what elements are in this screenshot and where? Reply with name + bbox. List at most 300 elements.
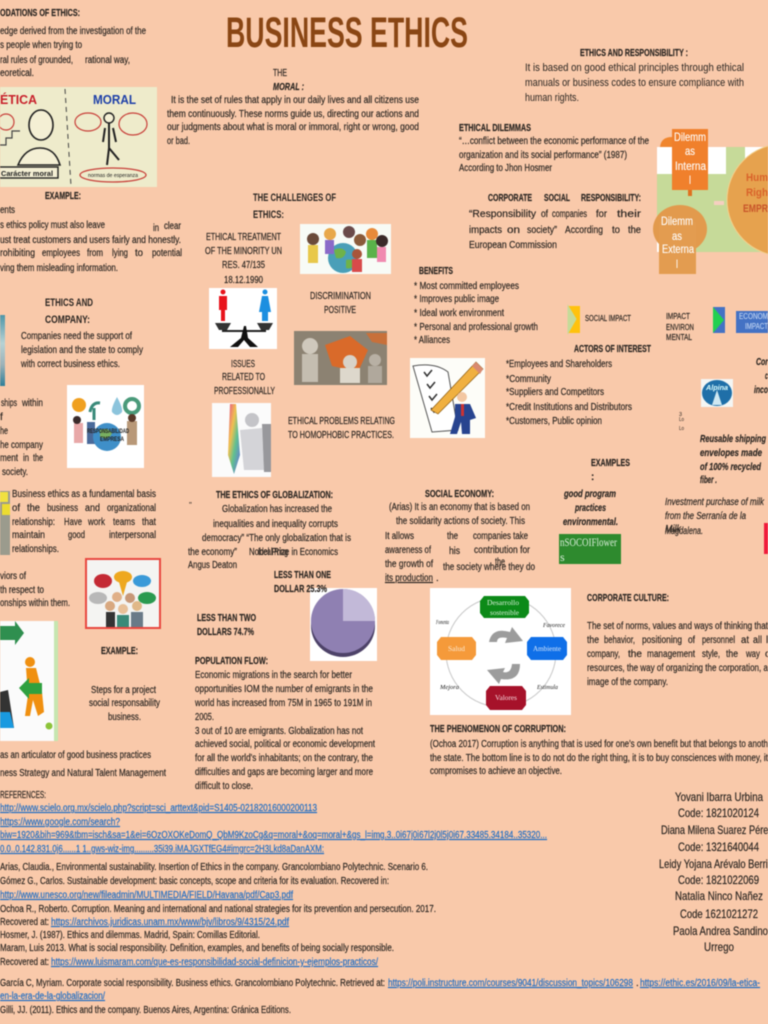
image: team with speech bubbles xyxy=(86,559,160,628)
text: social economy body: the xyxy=(495,557,505,568)
list: benefits: * Improves public image xyxy=(414,294,499,305)
heading: csr: CORPORATE xyxy=(488,193,532,204)
title: BUSINESS ETHICS xyxy=(226,9,468,57)
heading: the moral xyxy=(273,68,304,93)
panel: authors: Urrego xyxy=(704,940,734,954)
callout: external dilemmas: Externa xyxy=(662,242,694,256)
text: social economy body: his xyxy=(449,546,460,557)
text: behaviors of companies: onships within them. xyxy=(0,598,70,609)
text: business ethics as fundamental basis: interpersonal xyxy=(109,530,156,541)
list: reference entries: biw=1920&bih=969&tbm=isch&sa=1&ei=6OzOXOKeDomQ_QbM9KzoCg&q=moral+&oq=moral+&gs_l=img.3..0i67j0i67l2j0l5j0i67.33485.34184..35320... xyxy=(0,830,547,841)
arrow: upper curve xyxy=(489,627,523,643)
heading: ethics and responsibility: ETHICS AND RESPONSIBILITY : xyxy=(580,48,688,59)
text: foundations body: eoretical. xyxy=(0,68,34,79)
text: discrimination positive: DISCRIMINATION xyxy=(310,291,371,302)
text: population body: 2005. xyxy=(195,712,214,723)
text: corporate culture body: style, xyxy=(702,649,720,660)
text: csr body: the xyxy=(628,225,641,236)
text: example body: potential xyxy=(152,248,182,259)
node: desarrollo sostenible: Desarrollo xyxy=(487,599,520,607)
panel: corporate social responsibility xyxy=(469,193,642,251)
text: social economy body: contribution for xyxy=(474,545,531,556)
list: reference entries: https://www.luismaram.com/que-es-responsibilidad-social-definicion-y-ejemplos-practicos/ xyxy=(51,957,378,968)
list: reference entries: . xyxy=(636,978,639,989)
text: example body: clear xyxy=(164,221,182,232)
text: company support: with correct business ethics. xyxy=(20,359,120,370)
label: environmental impact: MENTAL xyxy=(666,333,692,342)
label: less than one dollar: LESS THAN ONE xyxy=(274,570,331,581)
text: moral body: It is the set of rules that apply in our daily lives and all citizens use xyxy=(171,95,419,106)
text: business ethics as fundamental basis: and xyxy=(85,503,100,514)
heading: challenges: ETHICS: xyxy=(253,209,284,221)
text: globalization body xyxy=(188,501,351,571)
callout: internal dilemmas: l xyxy=(689,173,691,187)
text: social economy body: the society where they do xyxy=(443,562,535,573)
list: reference entries: Recovered at: xyxy=(0,957,49,968)
image: etica and moral comparison: normas de esperanza xyxy=(88,173,138,179)
text: relationships within: society. xyxy=(2,467,28,478)
node: valores xyxy=(486,686,526,710)
list: reference entries: Maram, Luis 2013. What is social responsibility. Definition, examples, and benefits of being socially responsible. xyxy=(0,943,394,954)
label: less than two dollars xyxy=(197,613,256,638)
icon: social impact chevron xyxy=(568,306,631,333)
heading: csr: SOCIAL xyxy=(544,193,570,204)
list: actors: *Employees and Shareholders xyxy=(506,359,612,370)
text: corporate culture body: of xyxy=(688,635,695,646)
image: red clipped block xyxy=(764,523,768,554)
panel: benefits xyxy=(414,266,538,346)
text: tiny marks: Lo xyxy=(679,417,684,423)
list: reference entries: http://www.unesco.org/new/fileadmin/MULTIMEDIA/FIELD/Havana/pdf/Cap3.pdf xyxy=(0,890,293,901)
image: environmental responsibility people: RESPONSABILIDAD xyxy=(87,429,129,435)
text: csr body: society” xyxy=(527,225,557,236)
callout: external dilemmas: l xyxy=(676,257,678,271)
text: csr body: of xyxy=(541,209,548,220)
chart: pie of income xyxy=(310,588,377,661)
text: example body: ving them misleading information. xyxy=(0,263,118,274)
text: social economy body: companies take xyxy=(473,531,528,542)
image: rainbow flag figures xyxy=(212,403,271,477)
heading: ethics and company xyxy=(45,297,93,326)
panel: ethics of globalization xyxy=(188,490,377,661)
heading: csr: RESPONSIBILITY: xyxy=(581,193,641,204)
text: population body: difficult to close. xyxy=(195,781,253,792)
text: relationships within: ment xyxy=(0,453,18,464)
text: corporate culture body: the xyxy=(726,649,738,660)
text: corporate culture body: way xyxy=(745,649,760,660)
text: business ethics as fundamental basis: business xyxy=(47,503,78,514)
panel: corporate culture xyxy=(587,593,768,688)
callout: internal dilemmas xyxy=(660,129,708,196)
node: ambiente xyxy=(527,637,567,660)
badge: flowers: s xyxy=(560,550,565,564)
text: population body xyxy=(194,670,375,792)
text: dilemmas body: According to Jhon Hosmer xyxy=(459,163,553,174)
text: relationships within: ships xyxy=(1,398,17,409)
image: sticky notes clipped xyxy=(0,491,10,555)
text: globalization body: Ideal Ring xyxy=(258,547,288,558)
text: social economy body xyxy=(385,502,535,584)
label: less than one dollar xyxy=(274,570,331,595)
text: moral body xyxy=(167,95,419,147)
list: benefits: * Alliances xyxy=(414,335,450,346)
heading: corporate culture: CORPORATE CULTURE: xyxy=(587,593,669,604)
panel: ethical dilemmas xyxy=(459,123,649,174)
list: reference entries: Gómez G., Carlos. Sustainable development: basic concepts, scope and criteria for its evaluation. Recovered in: xyxy=(0,876,389,887)
text: dilemmas body xyxy=(459,136,649,174)
node: valores: Valores xyxy=(495,694,517,702)
text: business ethics as fundamental basis: the xyxy=(27,503,40,514)
text: moral body: our judgments about what is moral or immoral, right or wrong, good xyxy=(167,122,419,133)
badge: flowers xyxy=(559,534,621,564)
text: articulator of good practices xyxy=(0,750,166,779)
icon: alpina logo xyxy=(701,379,733,407)
list: reference entries: http://www.scielo.org.mx/scielo.php?script=sci_arttext&pid=S1405-02182016000200113 xyxy=(0,803,317,814)
text: foundations body: rational way, xyxy=(85,55,130,66)
labels: cycle verbs: Mejora xyxy=(439,685,459,691)
image: balance scale xyxy=(209,288,277,349)
label: less than two dollars: DOLLARS 74.7% xyxy=(197,627,254,638)
list: actors: *Suppliers and Competitors xyxy=(506,387,604,398)
list: reference entries: https://archivos.juridicas.unam.mx/www/bjv/libros/9/4315/24.pdf xyxy=(51,917,289,928)
text: business ethics as fundamental basis: Have xyxy=(64,517,82,528)
diagram: dilemmas and human rights xyxy=(653,129,768,274)
text: csr body: companies xyxy=(552,209,587,220)
diagram: sustainable development cycle xyxy=(430,588,571,715)
text: globalization body: the economy” xyxy=(188,547,237,558)
text: steps body xyxy=(89,685,160,723)
text: corporate culture body: company, xyxy=(587,649,620,660)
text: moral body: or bad. xyxy=(167,136,190,147)
heading: ethical dilemmas: ETHICAL DILEMMAS xyxy=(459,123,531,134)
text: company clipped note xyxy=(754,357,768,396)
text: globalization body: democracy” “The only globalization that is xyxy=(202,533,351,544)
image: orange figures photo xyxy=(294,331,387,385)
callout: internal dilemmas: Dilemm xyxy=(674,130,706,144)
image: environmental responsibility people xyxy=(67,385,144,468)
text: good program practices: good program xyxy=(563,489,616,500)
text: relationships within: within xyxy=(21,398,43,409)
text: company support: Companies need the support of xyxy=(21,331,132,342)
panel: the challenges of ethics xyxy=(205,192,395,477)
label: environmental impact xyxy=(666,312,694,342)
text: corporate culture body: positioning xyxy=(642,635,682,646)
text: example body: in xyxy=(153,223,159,234)
panel: references xyxy=(0,790,760,1016)
text: discrimination positive xyxy=(310,291,371,316)
text: articulator of good practices: as an articulator of good business practices xyxy=(0,750,151,761)
text: issues related to professionally xyxy=(214,359,275,397)
text: example body: employees xyxy=(42,248,80,259)
panel: examples xyxy=(559,458,630,564)
label: environmental impact: ENVIRON xyxy=(666,323,694,332)
text: business ethics as fundamental basis: teams xyxy=(113,517,135,528)
heading: the moral: THE xyxy=(273,68,287,79)
panel: phenomenon of corruption xyxy=(430,724,768,777)
text: steps body: social responsability xyxy=(89,698,160,709)
text: behaviors of companies: th respect to xyxy=(0,585,44,596)
arrow: lower curve xyxy=(487,664,520,684)
text: company support: legislation and the state to comply xyxy=(21,345,143,356)
text: social economy body: (Arias) It is an economy that is based on xyxy=(389,502,530,513)
text: social economy body: the growth of xyxy=(385,559,433,570)
text: steps body: business. xyxy=(108,712,141,723)
text: foundations body: s people when trying to xyxy=(0,40,82,51)
text: corporate culture body: all xyxy=(753,635,762,646)
text: steps body: Steps for a project xyxy=(91,685,156,696)
heading: population flow: POPULATION FLOW: xyxy=(195,656,268,667)
label: less than one dollar: DOLLAR 25.3% xyxy=(274,584,327,595)
callout: internal dilemmas: Interna xyxy=(675,159,706,173)
text: ethical problems homophobic: ETHICAL PROBLEMS RELATING xyxy=(288,416,395,427)
labels: cycle verbs: Estimula xyxy=(536,685,558,691)
icon: economic impact chevron xyxy=(713,307,768,333)
icon: social impact chevron: SOCIAL IMPACT xyxy=(585,314,631,323)
text: dilemmas body: “…conflict between the economic performance of the xyxy=(459,136,649,147)
heading: social economy: SOCIAL ECONOMY: xyxy=(425,489,494,500)
callout: external dilemmas: Dilemm xyxy=(661,214,693,228)
text: issues related to professionally: RELATED TO xyxy=(222,372,265,383)
text: csr body: their xyxy=(617,209,642,220)
text: investment purchase of milk: Magdalena. xyxy=(665,526,703,537)
text: business ethics as fundamental basis: relationship: xyxy=(12,517,55,528)
text: corporate culture body: at xyxy=(741,635,749,646)
panel: ethics and company xyxy=(0,297,144,478)
heading: ethics and company: ETHICS AND xyxy=(45,297,93,309)
list: reference entries: Arias, Claudia., Environmental sustainability. Insertion of Ethics in the company. Grancolombiano Polytechnic. Scenario 6. xyxy=(0,862,428,873)
text: corruption body: compromises to achieve an objective. xyxy=(430,766,562,777)
node: salud: Salud xyxy=(448,645,466,653)
text: business ethics as fundamental basis: that xyxy=(142,517,156,528)
text: relationships within: the xyxy=(33,453,43,464)
text: csr body: “Responsibility xyxy=(469,209,536,220)
list: reference entries xyxy=(0,803,760,1016)
text: csr body: to xyxy=(612,225,620,236)
text: responsibility body: human rights. xyxy=(525,92,579,104)
text: population body: achieved social, political or economic development xyxy=(195,739,375,750)
heading: globalization: THE ETHICS OF GLOBALIZATION: xyxy=(216,490,333,501)
text: relationships within xyxy=(0,398,43,478)
text: example body: rohibiting xyxy=(0,248,35,259)
text: social economy body: its production xyxy=(385,573,433,584)
list: reference entries: Ochoa R., Roberto. Corruption. Meaning and international and national strategies for its prevention and persecution. 2017. xyxy=(0,904,436,915)
text: ethical problems homophobic: TO HOMOPHOBIC PRACTICES. xyxy=(288,430,394,441)
text: moral body: them continuously. These norms guide us, directing our actions and xyxy=(167,109,419,120)
heading: examples xyxy=(591,458,630,483)
heading: foundations: ODATIONS OF ETHICS: xyxy=(0,8,80,19)
text: population body: for all the world's inhabitants; on the contrary, the xyxy=(195,753,373,764)
text: social economy body: . xyxy=(436,573,439,584)
image: checklist and pencil xyxy=(410,358,485,438)
heading: challenges: THE CHALLENGES OF xyxy=(253,192,336,204)
list: actors: *Community xyxy=(506,374,551,385)
text: issues related to professionally: ISSUES xyxy=(231,359,255,370)
text: behaviors of companies xyxy=(0,571,70,609)
text: ethical treatment of minority xyxy=(205,232,282,286)
text: corporate culture body: management xyxy=(647,649,695,660)
panel: actors of interest xyxy=(506,344,651,427)
text: example body: lying xyxy=(112,248,128,259)
text: corporate culture body xyxy=(587,621,768,688)
image: children around globe xyxy=(300,224,391,274)
text: tiny marks xyxy=(679,412,684,432)
text: tiny marks: 3 xyxy=(679,412,682,418)
text: example body: from xyxy=(87,248,103,259)
panel: social economy xyxy=(385,489,535,584)
callout: external dilemmas xyxy=(653,205,707,274)
text: social economy body: the solidarity actions of society. This xyxy=(396,516,525,527)
text: globalization body: Nobel Prize in Economics xyxy=(249,547,338,558)
list: benefits: * Ideal work environment xyxy=(414,308,504,319)
heading: examples: : xyxy=(591,472,594,483)
heading: references: REFERENCES: xyxy=(0,790,46,801)
text: globalization body: Globalization has increased the xyxy=(222,504,332,515)
panel: ethics and responsibility xyxy=(525,48,744,104)
text: business ethics as fundamental basis: relationships. xyxy=(12,544,59,555)
callout: external dilemmas: as xyxy=(672,229,682,243)
text: tiny marks: Lo xyxy=(679,426,684,432)
list: benefits: * Most committed employees xyxy=(414,281,519,292)
text: business ethics as fundamental basis: of xyxy=(12,503,20,514)
panel: authors xyxy=(659,790,768,954)
node: desarrollo sostenible xyxy=(480,596,529,618)
text: ethical treatment of minority: 18.12.1990 xyxy=(224,275,263,286)
text: business ethics as fundamental basis: good xyxy=(68,530,85,541)
text: articulator of good practices: ness Strategy and Natural Talent Management xyxy=(0,768,166,779)
text: responsibility body xyxy=(525,62,744,104)
image: clipped blue photo xyxy=(0,315,5,386)
text: investment purchase of milk: from the Serranía de la xyxy=(665,511,746,522)
image: person pushing pyramid steps xyxy=(0,621,58,741)
list: actors: *Customers, Public opinion xyxy=(506,416,602,427)
text: population body: 3 out of 10 are emigrants. Globalization has not xyxy=(195,726,363,737)
text: investment purchase of milk xyxy=(665,497,765,537)
heading: corruption: THE PHENOMENON OF CORRUPTION: xyxy=(430,724,566,735)
badge: flowers: nSOCOIFlower xyxy=(560,535,617,549)
text: ethical treatment of minority: RES. 47/135 xyxy=(222,260,265,271)
text: foundations body xyxy=(0,26,146,79)
text: ethical treatment of minority: OF THE MINORITY UN xyxy=(205,246,282,257)
node: desarrollo sostenible: sostenible xyxy=(490,609,519,617)
text: csr body xyxy=(469,209,642,251)
panel: the moral definition xyxy=(167,68,419,147)
label: human rights xyxy=(743,172,768,215)
panel: ethics example xyxy=(0,191,182,274)
node: salud xyxy=(437,637,476,660)
list: reference entries: en-la-era-de-la-globalizacion/ xyxy=(0,991,105,1002)
text: csr body: on xyxy=(507,225,520,236)
text: globalization body: " xyxy=(189,501,192,510)
text: business ethics as fundamental basis xyxy=(12,489,156,555)
text: good program practices: practices xyxy=(574,503,606,514)
text: example body: to xyxy=(135,248,143,259)
image: etica and moral comparison: Carácter moral xyxy=(1,169,53,178)
text: corporate culture body: the xyxy=(628,649,642,660)
heading: the moral: MORAL : xyxy=(273,82,304,93)
heading: example steps: EXAMPLE: xyxy=(101,646,138,657)
label: environmental impact: IMPACT xyxy=(666,312,690,321)
text: discrimination positive: POSITIVE xyxy=(324,305,356,316)
list: actors: *Credit Institutions and Distributors xyxy=(506,402,632,413)
text: relationships within: in xyxy=(23,453,29,464)
heading: csr xyxy=(488,193,641,204)
text: ethical treatment of minority: ETHICAL TREATMENT xyxy=(206,232,281,243)
list: reference entries: 0.0..0.142.831.0j6......1 1..gws-wiz-img.........35i39.iMAJGXTfEG4#imgrc=2H3Lkd8aDanAXM: xyxy=(0,844,324,855)
label: less than two dollars: LESS THAN TWO xyxy=(197,613,256,624)
text: example body xyxy=(0,205,182,274)
text: social economy body: It allows xyxy=(385,531,414,542)
text: relationships within: f xyxy=(0,412,3,423)
callout: internal dilemmas: as xyxy=(685,144,695,158)
text: foundations body: ral rules of grounded, xyxy=(0,55,73,66)
text: dilemmas body: organization and its social performance” (1987) xyxy=(459,150,627,161)
text: globalization body: inequalities and inequality corrupts xyxy=(213,519,338,530)
text: corruption body xyxy=(430,739,768,777)
text: good program practices xyxy=(563,489,618,528)
list: benefits xyxy=(414,281,538,346)
text: population body: difficulties and gaps are becoming larger and more xyxy=(195,767,373,778)
text: corporate culture body: personnel xyxy=(702,635,735,646)
panel: foundations of ethics xyxy=(0,8,146,79)
text: population body: world has increased from 75M in 1965 to 191M in xyxy=(194,698,372,709)
text: csr body: According xyxy=(565,225,603,236)
text: social economy body: awareness of xyxy=(385,545,431,556)
labels: cycle verbs: Fomenta xyxy=(435,620,449,626)
text: investment purchase of milk: Milk xyxy=(665,524,682,535)
text: example steps for a project xyxy=(89,646,160,723)
text: csr body: European Commission xyxy=(469,240,557,251)
node: ambiente: Ambiente xyxy=(533,645,561,653)
image: etica and moral comparison: ÉTICA xyxy=(0,92,38,107)
text: corporate culture body: image of the company. xyxy=(587,677,668,688)
heading: examples: EXAMPLES xyxy=(591,458,630,469)
text: corporate culture body: the xyxy=(587,635,599,646)
list: reference entries: Recovered at: xyxy=(0,917,49,928)
text: reusable shipping envelopes xyxy=(700,434,766,486)
text: company support xyxy=(20,331,143,370)
text: relationships within: he company xyxy=(0,440,43,451)
text: csr body: impacts xyxy=(469,225,502,236)
text: business ethics as fundamental basis: Business ethics as a fundamental basis xyxy=(12,489,156,500)
text: reusable shipping envelopes: fiber . xyxy=(700,475,717,486)
text: foundations body: edge derived from the investigation of the xyxy=(0,26,146,37)
icon: alpina logo: Alpina xyxy=(705,385,728,392)
list: reference entries: https://poli.instructure.com/courses/9041/discussion_topics/106298 xyxy=(388,978,633,989)
text: social economy body: the xyxy=(447,531,458,542)
text: globalization body: Angus Deaton xyxy=(188,560,237,571)
labels: cycle verbs xyxy=(435,620,565,691)
text: business ethics as fundamental basis: maintain xyxy=(12,530,45,541)
panel: population flow xyxy=(194,656,375,792)
text: business ethics as fundamental basis: organizational xyxy=(107,503,156,514)
text: example body: ents xyxy=(0,205,15,216)
image: environmental responsibility people: EMPRESA xyxy=(100,437,125,443)
heading: ethics and company: COMPANY: xyxy=(45,314,90,326)
list: reference entries: Gilli, JJ. (2011). Ethics and the company. Buenos Aires, Argentina: Gránica Editions. xyxy=(0,1005,291,1016)
text: population body: opportunities IOM the number of emigrants in the xyxy=(195,684,373,695)
text: csr body: for xyxy=(596,209,608,220)
heading: example: EXAMPLE: xyxy=(45,191,81,202)
text: ethical problems homophobic xyxy=(288,416,395,441)
image: etica and moral comparison: MORAL xyxy=(93,92,136,107)
list: reference entries: García C, Myriam. Corporate social responsibility. Business ethics. Grancolombiano Polytechnic. Retrieved at: xyxy=(0,978,385,989)
list: reference entries: https://www.google.com/search? xyxy=(0,817,120,828)
text: good program practices: environmental. xyxy=(563,517,618,528)
text: example body: ust treat customers and users fairly and honestly. xyxy=(0,235,181,246)
list: benefits: * Personal and professional growth xyxy=(414,322,538,333)
heading: actors of interest: ACTORS OF INTEREST xyxy=(574,344,651,355)
list: reference entries: Hosmer, J. (1987). Ethics and dilemmas. Madrid, Spain: Comillas Editorial. xyxy=(0,930,260,941)
